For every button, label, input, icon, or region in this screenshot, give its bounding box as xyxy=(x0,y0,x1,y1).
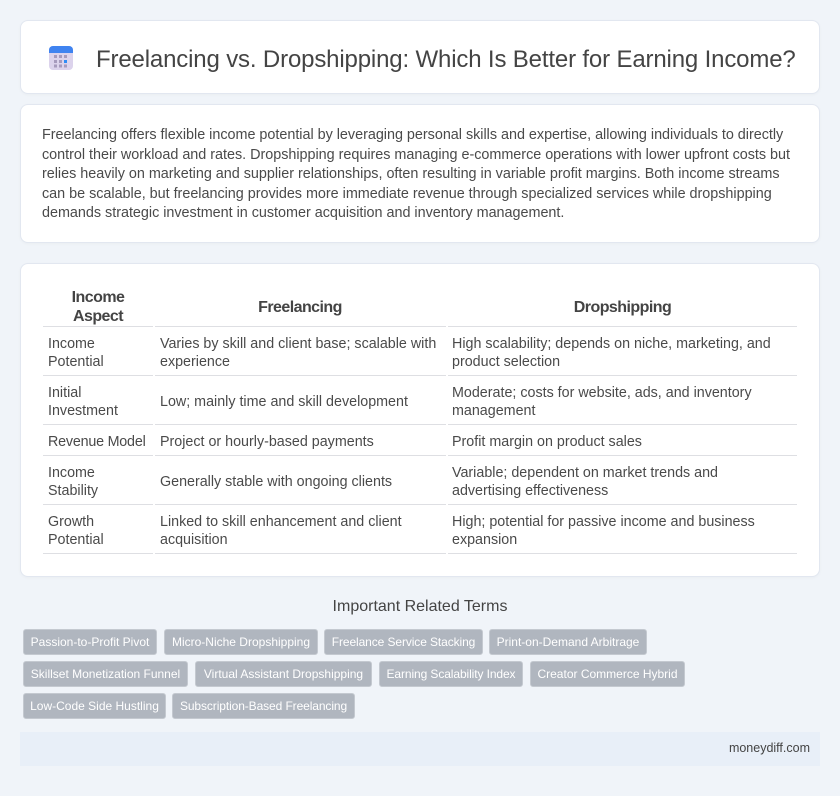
row: income stability xyxy=(48,465,718,499)
row: growth potential: High; potential for passive income and business xyxy=(452,514,755,530)
table header: income aspect: Income xyxy=(72,289,124,306)
footer bar xyxy=(20,732,820,766)
table header: income aspect: Aspect xyxy=(73,308,123,325)
row: growth potential: Growth xyxy=(48,514,94,530)
tag: Subscription-Based Freelancing xyxy=(180,699,347,713)
row: growth potential: Potential xyxy=(48,532,104,548)
icon: calendar xyxy=(49,46,73,70)
row: income stability: Stability xyxy=(48,483,98,499)
intro paragraph: can be scalable, but freelancing provides more immediate revenue through specialized services while dropshipping xyxy=(42,186,772,202)
row: revenue model xyxy=(48,434,642,450)
panel: title header xyxy=(20,20,820,94)
tag: Virtual Assistant Dropshipping xyxy=(204,667,363,681)
row: growth potential: expansion xyxy=(452,532,517,548)
panel: comparison table xyxy=(20,263,820,577)
row: income potential: Varies by skill and client base; scalable with xyxy=(160,336,436,352)
row: income stability: Variable; dependent on market trends and xyxy=(452,465,718,481)
tag xyxy=(530,661,685,687)
row: revenue model: Revenue Model xyxy=(48,434,146,450)
intro paragraph: Freelancing offers flexible income potential by leveraging personal skills and expertise, allowing individuals to directly xyxy=(42,127,783,143)
tag xyxy=(324,629,483,655)
tag: Freelance Service Stacking xyxy=(332,635,475,649)
tag xyxy=(164,629,318,655)
footer source text: moneydiff.com xyxy=(729,741,810,755)
row: revenue model: Profit margin on product sales xyxy=(452,434,642,450)
row: income potential: High scalability; depends on niche, marketing, and xyxy=(452,336,771,352)
row: initial investment: Initial xyxy=(48,385,81,401)
table header: dropshipping: Dropshipping xyxy=(574,299,671,316)
row: initial investment xyxy=(48,385,752,419)
tag xyxy=(379,661,523,687)
intro paragraph: demands strategic investment in customer acquisition and inventory management. xyxy=(42,205,564,221)
tag: Low-Code Side Hustling xyxy=(30,699,159,713)
row: growth potential: acquisition xyxy=(160,532,228,548)
row: revenue model: Project or hourly-based payments xyxy=(160,434,374,450)
tag: Micro-Niche Dropshipping xyxy=(172,635,310,649)
row: income stability: Generally stable with ongoing clients xyxy=(160,474,392,490)
intro paragraph: relies heavily on marketing and supplier relationships, often resulting in variable profit margins. Both income streams xyxy=(42,166,780,182)
tag xyxy=(172,693,355,719)
title: Freelancing vs. Dropshipping: Which Is Better for Earning Income? xyxy=(96,46,796,73)
tag: Passion-to-Profit Pivot xyxy=(31,635,149,649)
row: initial investment: Moderate; costs for website, ads, and inventory xyxy=(452,385,752,401)
tag xyxy=(195,661,372,687)
tag xyxy=(23,661,188,687)
tag xyxy=(23,693,166,719)
row: income stability: Income xyxy=(48,465,95,481)
row: initial investment: Low; mainly time and skill development xyxy=(160,394,408,410)
panel: related term tags xyxy=(23,629,685,719)
tag xyxy=(489,629,647,655)
table header: income aspect xyxy=(72,289,124,325)
tag: Creator Commerce Hybrid xyxy=(537,667,678,681)
row: income potential: experience xyxy=(160,354,230,370)
row: income stability: advertising effectiveness xyxy=(452,483,608,499)
row: growth potential: Linked to skill enhancement and client xyxy=(160,514,402,530)
tag xyxy=(23,629,157,655)
row: initial investment: management xyxy=(452,403,535,419)
tag: Print-on-Demand Arbitrage xyxy=(497,635,639,649)
row: initial investment: Investment xyxy=(48,403,118,419)
table header: freelancing: Freelancing xyxy=(258,299,342,316)
tag: Skillset Monetization Funnel xyxy=(31,667,180,681)
intro paragraph: control their workload and rates. Dropshipping requires managing e-commerce operations with lower upfront costs but xyxy=(42,146,790,162)
heading: important related terms: Important Related Terms xyxy=(333,598,507,615)
intro paragraph xyxy=(42,127,790,221)
row: income potential xyxy=(48,336,771,370)
row: income potential: Income xyxy=(48,336,95,352)
row: income potential: product selection xyxy=(452,354,560,370)
row: growth potential xyxy=(48,514,755,548)
panel: introduction text xyxy=(20,104,820,243)
row: income potential: Potential xyxy=(48,354,104,370)
tag: Earning Scalability Index xyxy=(387,667,515,681)
